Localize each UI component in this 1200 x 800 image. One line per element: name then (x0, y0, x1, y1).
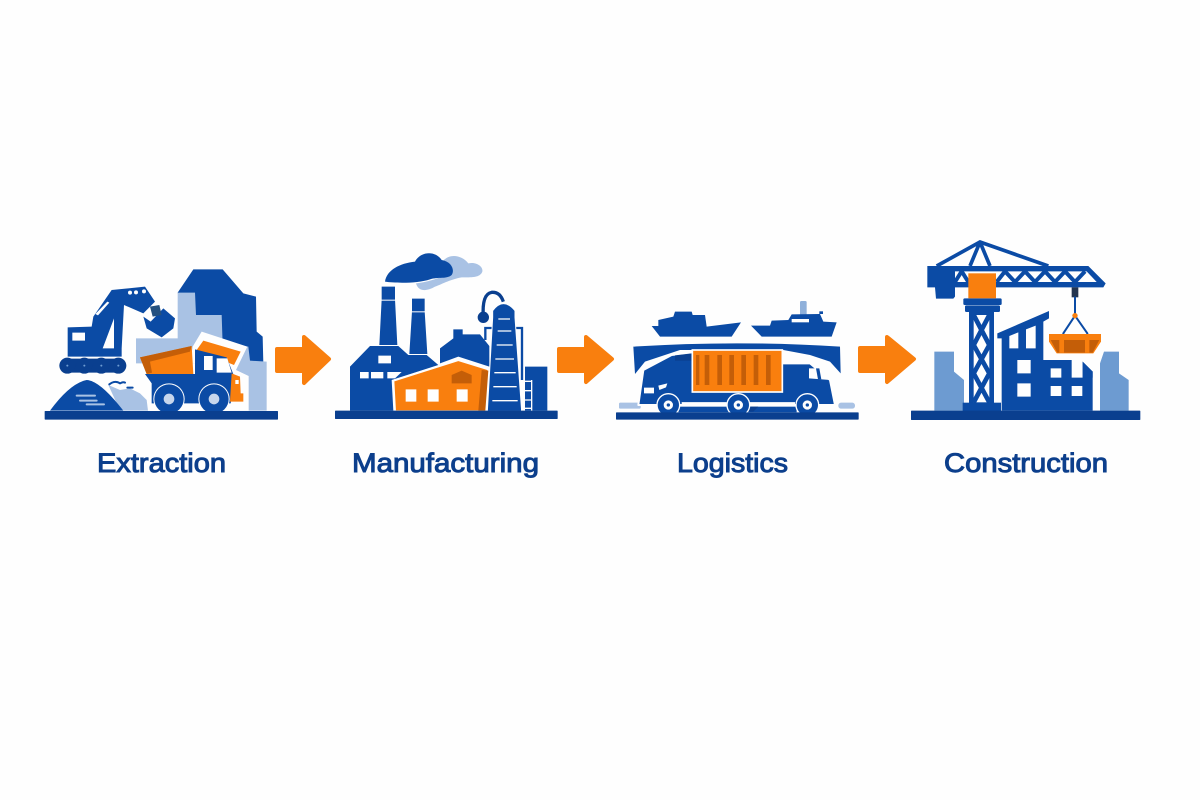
arrow: manufacturing to logistics (559, 337, 612, 382)
ground (335, 411, 558, 419)
label: Logistics: Logistics (677, 448, 788, 478)
label: Manufacturing: Manufacturing (352, 448, 539, 478)
ground (616, 412, 859, 420)
light pads (619, 403, 855, 409)
icon: extraction scene (45, 269, 278, 420)
hook and load (1049, 287, 1101, 353)
ground (45, 411, 278, 420)
mountain (136, 269, 267, 411)
background buildings (934, 352, 1129, 411)
ground (911, 411, 1140, 420)
label: Extraction: Extraction (97, 448, 226, 478)
icon: manufacturing scene (335, 253, 558, 419)
orange workshop (393, 360, 488, 411)
excavator (59, 287, 175, 374)
tower crane (927, 242, 1106, 411)
distillation tower (478, 292, 547, 411)
dump truck (140, 341, 243, 415)
smoke clouds (385, 253, 482, 290)
ship left (652, 312, 741, 337)
label: Construction: Construction (944, 448, 1108, 478)
ore pile (50, 380, 148, 411)
deck band (633, 343, 841, 374)
icon: construction scene (911, 242, 1140, 420)
arrow: extraction to manufacturing (277, 337, 329, 383)
arrow: logistics to construction (860, 337, 914, 382)
factory (350, 287, 489, 411)
main building (997, 311, 1093, 411)
ship right (751, 301, 837, 337)
truck (638, 350, 835, 416)
icon: logistics scene (616, 301, 859, 420)
